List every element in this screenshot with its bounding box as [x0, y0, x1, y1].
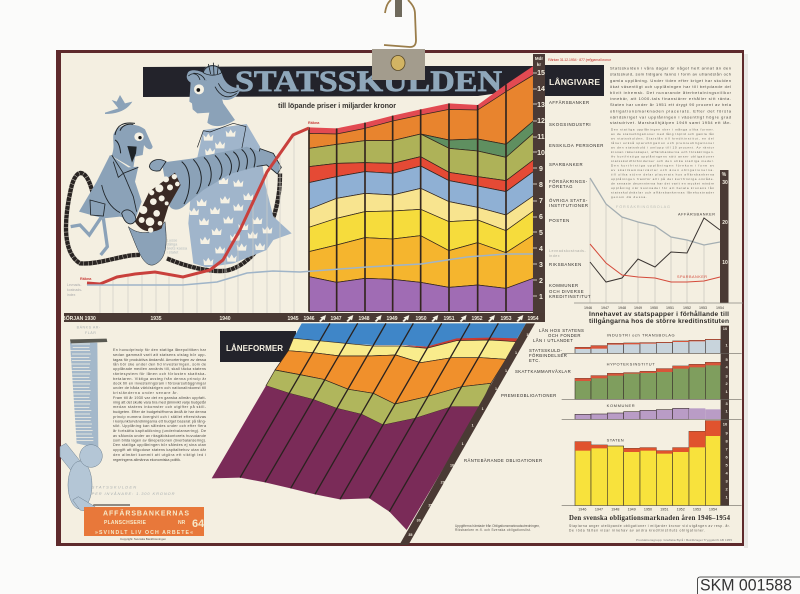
- slanted chart: loan forms: [212, 323, 535, 545]
- bar charts: institutions: 5: [726, 357, 729, 362]
- text block: lower left: tagas för produktiva ändamål. Amorteringen av dessa: [113, 358, 207, 362]
- slanted chart: loan forms: 25: [428, 504, 432, 508]
- slanted chart: loan forms: 1: [462, 442, 464, 446]
- line labels: index: [67, 293, 76, 297]
- text block: upper right small: lånet också sparobligation och premieobligationer: [611, 141, 714, 145]
- icon: stack of paper on baby Atlas: FLÄR: [85, 331, 96, 335]
- loan form labels: RÄNTEBÄRANDE OBLIGATIONER: [464, 458, 542, 463]
- bar charts: institutions: 4: [726, 470, 729, 475]
- lender labels: INSTITUTIONER: [549, 203, 588, 208]
- bar charts: institutions: 3: [726, 373, 729, 378]
- slanted chart: loan forms: 1: [515, 351, 517, 355]
- text block: lower left: den allmänt kommit att utgöra ett viktigt led i: [113, 453, 206, 457]
- bar charts: institutions: HYPOTEKSINSTITUT: [607, 362, 655, 367]
- line chart: share of holdings: 1952: [683, 306, 691, 310]
- text block: upper right small: [611, 128, 714, 199]
- time axis band: 1935: [150, 316, 162, 322]
- loan form labels: FÖRBINDELSER: [529, 353, 567, 358]
- text block: lower left: [113, 348, 207, 462]
- axis: miljarder kronor: 14: [537, 86, 545, 93]
- line labels: kostnads-: [67, 288, 83, 292]
- text block: upper right small: Av kortfristiga upplåningens sätt anser obligationer: [611, 154, 714, 158]
- lender labels: SPARBANKER: [549, 162, 583, 167]
- date note: Räntan 31.12.1954 · 877 (ref)gamal kronor: [548, 58, 612, 62]
- bars: hypoteksinstitut: [575, 362, 721, 399]
- caption: obligation market: De röda fälten visar innehav av andra kreditinstituts obligationer.: [569, 528, 705, 532]
- text block: lower left: budgeten. Efter de budgetsiffrorna ändå är har denna: [113, 410, 207, 414]
- loan form labels: PREMIEOBLIGATIONER: [501, 393, 557, 398]
- text block: lower left: krisländerna under senare år.: [113, 391, 178, 395]
- text block: lower left: som bilda lagen av lånepersonen (överbalansering).: [113, 438, 206, 442]
- axis: miljarder kronor: 8: [539, 182, 543, 189]
- time axis band: 1949: [386, 316, 398, 322]
- time axis band: 1954: [527, 316, 539, 322]
- text block: upper right large: Staten har under år 1951 ett drygt 90 procent av hela: [610, 102, 732, 107]
- lender labels: POSTEN: [549, 218, 570, 223]
- loan form labels: OCH FONDER: [548, 333, 581, 338]
- heading: holdings: [589, 310, 729, 325]
- text block: lower left: betalaren. Viktiga avsteg från denna princip är: [113, 377, 207, 381]
- lender labels: Levnadskostnads-: [549, 249, 586, 253]
- lender labels: FÖRETAG: [549, 184, 573, 189]
- heading: obligation market: Den svenska obligationsmarknaden åren 1946–1954: [569, 515, 731, 522]
- subtitle: till löpande priser i miljarder kronor: [278, 101, 396, 110]
- bar charts: institutions: 3: [726, 478, 729, 483]
- series badge: [84, 507, 205, 536]
- text block: lower left: upplånade medlen använts till, skall täcka statens: [113, 367, 206, 371]
- text block: upper right small: upplåningen framför allt på det kortfristiga område.: [611, 177, 714, 181]
- time axis band: 1951: [443, 316, 455, 322]
- lender labels: AFFÄRSBANKER: [549, 100, 590, 105]
- caption: obligation market: Staplarna anger utelöpande obligationer i miljarder kronor vid utgången av resp. år.: [569, 524, 730, 528]
- text block: lower left: medan statens inkomster och utgifter på skill-: [113, 405, 207, 409]
- archive number: SKM 001588: [700, 576, 792, 594]
- bars: kommuner: [575, 408, 721, 419]
- line chart: share of holdings: 1946: [584, 306, 592, 310]
- illustration: hose: [66, 173, 280, 271]
- axis: miljarder kronor: 13: [537, 102, 545, 109]
- lender labels: SKOGSINDUSTRI: [549, 122, 591, 127]
- slanted chart: loan forms: 1: [495, 387, 497, 391]
- slanted chart: loan forms: 15: [526, 333, 530, 337]
- text block: upper right small: de senaste decennierna har det varit en mycket mindre: [611, 182, 714, 186]
- slanted chart: loan forms: 30: [417, 519, 421, 523]
- main stacked area chart: lenders: [309, 66, 533, 312]
- text block: lower left: En huvudprincip för den statliga lånepolitiken har: [113, 348, 207, 352]
- text block: upper right large: världskriget var upplåningen i väsentligt högre grad: [610, 114, 731, 120]
- line labels: Räkna: [308, 121, 320, 125]
- text block: upper right small: till olika större delar placerats hos affärsbankerna: [611, 172, 714, 176]
- lender labels: KREDITINSTITUT: [549, 294, 591, 299]
- source note: Riksbanken m.fl. och Svenska obligationslist.: [455, 528, 531, 532]
- text block: lower left: princip numera övergivit och i stället eftersträvas: [113, 415, 206, 419]
- heading: holdings: tillgångarna hos de större kreditinstituten: [589, 317, 729, 325]
- text block: upper right large: innebär, att 1000-tals finansiärer erhåller sitt ränta.: [610, 96, 731, 101]
- axis: miljarder kronor: kr: [537, 62, 541, 67]
- series badge: NR: [178, 520, 186, 526]
- axis: miljarder kronor: 15: [537, 70, 545, 77]
- text block: upper right small: av skattkammarväxlar och även obligationerna.: [611, 168, 714, 172]
- illustration: man with money sack: Lusse: [167, 238, 178, 243]
- text block: lower left: regeringens allmänna ekonomiska politik.: [113, 458, 181, 462]
- loan form labels: SKATTKAMMARVÄXLAR: [515, 369, 571, 374]
- time axis band: 1950: [415, 316, 427, 322]
- text block: upper right large: statsdrivet. Marshallhjälpen 1949 samt 1954 ett lån.: [610, 120, 731, 125]
- series badge: »SVINDLT LIV OCH ARBETE«: [95, 530, 193, 536]
- text block: upper right large: obligationsmarknaden placerats. Efter det första: [610, 108, 732, 114]
- line chart: share of holdings: FÖRSÄKRINGSBOLAG: [616, 205, 670, 209]
- slanted chart: loan forms: 10: [450, 464, 454, 468]
- line chart: share of holdings: 20: [722, 220, 728, 226]
- loan form labels: ETC.: [529, 358, 540, 363]
- lender labels: KOMMUNER: [549, 283, 579, 288]
- bars: industri och transbolag: [575, 339, 721, 353]
- text block: upper right large: blivit inhemsk. Det nuvarande återbetalningsvillkor: [610, 90, 732, 95]
- bar charts: institutions: 10: [723, 422, 728, 427]
- text block: lower left: Fram till år 1930 var det en ganska allmän uppfatt-: [113, 396, 207, 400]
- text block: lower left: dock till en investeringsram i försvarsutläggningar: [113, 382, 207, 386]
- loan form labels: STATSSKULD-: [529, 348, 563, 353]
- text block: lower left: räntesystem för lånen och förlusten skattska-: [113, 372, 207, 376]
- line labels: Levnads-: [67, 283, 82, 287]
- time axis band: [62, 313, 545, 322]
- text block: lower left: av sålunda under av riksgäldskontorets huvudande: [113, 434, 206, 438]
- line chart: share of holdings: AFFÄRSBANKER: [678, 212, 715, 216]
- bar charts: institutions: 1948: [611, 508, 619, 512]
- series badge: 64: [192, 518, 205, 530]
- text block: upper right small: av de statsobligationer med lång löptid och gamla lån: [611, 132, 714, 136]
- time axis band: 1948: [358, 316, 370, 322]
- axis: miljarder kronor: 10: [537, 150, 545, 157]
- illustration: man with money sack: årets kassa: [167, 246, 188, 251]
- text block: lower left: Den statliga upplåningen bör således ej sina utan: [113, 443, 206, 447]
- text block: upper right large: Statsskulden i våra dagar är något helt annat än den: [610, 66, 731, 70]
- line chart: share of holdings: [574, 170, 743, 310]
- bar charts: institutions: 3: [726, 401, 729, 406]
- bar charts: institutions: 5: [726, 462, 729, 467]
- icon: stack of paper on baby Atlas: STATSSKULDEN: [92, 484, 137, 489]
- text block: upper right small: statsskuldväxlar och affärsbankernas lånekostnader: [611, 190, 714, 194]
- bar charts: institutions: 1: [726, 494, 729, 499]
- line chart: share of holdings: 1948: [618, 306, 626, 310]
- text block: upper right small: av den statsskuld i omlopp till 10 procent. Av räntor: [611, 146, 714, 150]
- axis: miljarder kronor: Mdr: [535, 56, 543, 61]
- label box: låneformer: LÅNEFORMER: [226, 344, 283, 353]
- lender labels: OCH DIVERSE: [549, 289, 584, 294]
- bar charts: institutions: 1946: [578, 508, 586, 512]
- axis: miljarder kronor: 4: [539, 246, 543, 253]
- text block: lower left: sedan gammalt varit att statsens utslag bör upp-: [113, 353, 207, 357]
- bar charts: institutions: KOMMUNER: [607, 403, 635, 408]
- slanted chart: loan forms: 1: [505, 369, 507, 373]
- time axis band: 1952: [471, 316, 483, 322]
- bar charts: institutions: 8: [726, 438, 729, 443]
- bar charts: institutions: 9: [726, 430, 729, 435]
- axis: miljarder kronor: 11: [537, 134, 545, 141]
- bar charts: institutions: 1952: [677, 508, 685, 512]
- icon: stack of paper on baby Atlas: [60, 325, 175, 513]
- time axis band: 1953: [500, 316, 512, 322]
- axis: miljarder kronor: 7: [539, 198, 543, 205]
- cost of living index line: [87, 254, 545, 285]
- slanted chart: loan forms: 20: [441, 480, 445, 484]
- bar charts: institutions: 1: [726, 343, 729, 348]
- line chart: share of holdings: 1949: [634, 306, 642, 310]
- text block: lower left: år fortsätta kapitalökning (underbalansering). De: [113, 429, 206, 433]
- title band: [143, 65, 533, 98]
- line chart: share of holdings: 1954: [716, 306, 724, 310]
- time axis band: 1945: [287, 316, 299, 322]
- line chart grid: 1930-1946: [100, 135, 294, 313]
- line chart: share of holdings: 10: [722, 260, 728, 266]
- text block: lower left: under de båda världskrigen och nationalinkomst till: [113, 386, 206, 390]
- lender labels: FÖRSÄKRINGS-: [549, 179, 588, 184]
- icon: stack of paper on baby Atlas: PER INVÅNARE: 1.300 KRONOR: [92, 491, 175, 496]
- text block: lower left: i konjunkturvändningarna ett budget baserat på lång-: [113, 420, 207, 424]
- line chart: share of holdings: SPARBANKER: [677, 275, 707, 279]
- illustration: man with money sack: dåliga: [167, 242, 178, 247]
- time axis band: 1947: [330, 316, 342, 322]
- bar charts: institutions: 1951: [660, 508, 668, 512]
- caption: obligation market: [569, 524, 730, 532]
- text block: upper right small: genom dä dessa.: [611, 195, 647, 199]
- bar charts: institutions: 4: [726, 364, 729, 369]
- lender labels: ÖVRIGA STATS-: [549, 198, 588, 203]
- line chart: share of holdings: 30: [722, 180, 728, 186]
- text block: upper right small: av statsskulden. Statslån till kreditinstitut, en del: [611, 136, 714, 140]
- copyright: Copyright: Svenska Bankföreningen: [120, 537, 166, 541]
- time axis band: 1946: [303, 316, 315, 322]
- bar charts: institutions: 1: [726, 408, 729, 413]
- line chart: share of holdings: 1951: [666, 306, 674, 310]
- line labels: Räkna: [80, 277, 92, 281]
- slanted chart: loan forms: 1: [482, 407, 484, 411]
- illustration: woman Svea pouring money: [149, 63, 292, 267]
- bar charts: institutions: INDUSTRI och TRANSBOLAG: [607, 333, 675, 338]
- time axis band: 1940: [219, 316, 231, 322]
- bar charts: institutions: 6: [726, 454, 729, 459]
- bar charts: institutions: 1: [726, 389, 729, 394]
- source note: [455, 524, 540, 532]
- series badge: AFFÄRSBANKERNAS: [103, 510, 189, 518]
- axis: miljarder kronor: 1: [539, 294, 543, 301]
- loan form labels: LÅN I UTLANDET: [533, 338, 573, 343]
- icon: stack of paper on baby Atlas: BÄNKS AR-: [77, 325, 101, 329]
- text block: lower left: sikt. Upplåning kan således under och efter flera: [113, 424, 207, 428]
- bar charts: institutions: 1950: [644, 508, 652, 512]
- lender labels: RIKSBANKEN: [549, 262, 582, 267]
- bar charts: institutions: 10: [723, 326, 728, 331]
- text block: lower left: uppgift att tillgodose statens kapitalbehov utan där: [113, 448, 207, 452]
- illustration: man with money sack: [71, 95, 188, 265]
- legend box: långivare: LÅNGIVARE: [549, 77, 600, 87]
- lender labels: [549, 100, 604, 299]
- text block: lower left: lån bör ske under den tid investeringen, som de: [113, 362, 206, 366]
- text block: upper right large: ökat väsentligt och upplåningen har till betydande del: [610, 84, 731, 89]
- legend box: långivare: [545, 65, 604, 96]
- bar charts: institutions: 7: [726, 446, 729, 451]
- slanted chart: loan forms: 1: [472, 424, 474, 428]
- text block: upper right small: upplåning när kostnader för att betala kronans lån: [611, 186, 714, 190]
- axis: miljarder kronor: 9: [539, 166, 543, 173]
- credits: Produktionsgrupp: Grafiska Byrå / Bokförlaget Tryggskrift AB 1955: [636, 538, 732, 542]
- text block: upper right small: Den kortfristiga upplåningen förekom i form av: [611, 164, 714, 168]
- text block: upper right large: [610, 66, 732, 125]
- bar charts: institutions: 1953: [693, 508, 701, 512]
- axis: miljarder kronor: [533, 54, 545, 314]
- line chart: share of holdings: 1947: [601, 306, 609, 310]
- text block: upper right large: gamla upplåning. Under tiden efter kriget har skulden: [610, 78, 731, 83]
- line labels: [67, 121, 320, 297]
- loan form labels: [464, 328, 584, 463]
- text block: lower left: ning att det skulle vara bra med jämnvikt varje budgetår: [113, 400, 207, 404]
- axis: miljarder kronor: 3: [539, 262, 543, 269]
- axis: miljarder kronor: 2: [539, 278, 543, 285]
- bars: staten: [575, 421, 721, 506]
- line chart: share of holdings: 1950: [650, 306, 658, 310]
- title band: STATSSKULDEN: [235, 65, 502, 98]
- line chart: share of holdings: 1953: [699, 306, 707, 310]
- loan form labels: LÅN HOS STATENS: [539, 328, 584, 333]
- text block: upper right large: statsskuld, som tidigare fanns i form av utlandslån och: [610, 72, 731, 76]
- time axis band: BÖRJAN 1930: [62, 315, 96, 322]
- axis: miljarder kronor: 5: [539, 230, 543, 237]
- source note: Uppgifterna hämtade från Obligationsmarknadsutredningen,: [455, 524, 540, 528]
- text block: upper right small: statsskuldförbindelser och den olika statliga medel.: [611, 159, 714, 163]
- bar charts: institutions: [562, 326, 742, 512]
- bar charts: institutions: 2: [726, 486, 729, 491]
- red total debt line: [87, 128, 309, 284]
- bar charts: institutions: 1949: [628, 508, 636, 512]
- illustration: man with money sack: i statet: [167, 250, 179, 255]
- label box: låneformer: [220, 331, 296, 362]
- lender labels: ENSKILDA PERSONER: [549, 143, 604, 148]
- bar charts: institutions: 2: [726, 381, 729, 386]
- series badge: PLANSCHSERIE: [104, 520, 147, 526]
- text block: upper right small: kronan räkenskaper, affärsbankerna och försäkringen.: [611, 150, 714, 154]
- line chart: share of holdings: %: [722, 172, 727, 178]
- bar charts: institutions: 1954: [709, 508, 717, 512]
- bar charts: institutions: STATEN: [607, 437, 624, 442]
- heading: holdings: Innehavet av statspapper i förhållande till: [589, 310, 729, 318]
- icon: hanging hook and clip: [372, 0, 425, 80]
- text block: upper right small: Den statliga upplåningen sker i många olika former.: [611, 128, 714, 132]
- bar charts: institutions: 1947: [595, 508, 603, 512]
- lender labels: index: [549, 254, 560, 258]
- axis: miljarder kronor: 12: [537, 118, 545, 125]
- slanted chart: loan forms: 35: [408, 533, 412, 537]
- axis: miljarder kronor: 6: [539, 214, 543, 221]
